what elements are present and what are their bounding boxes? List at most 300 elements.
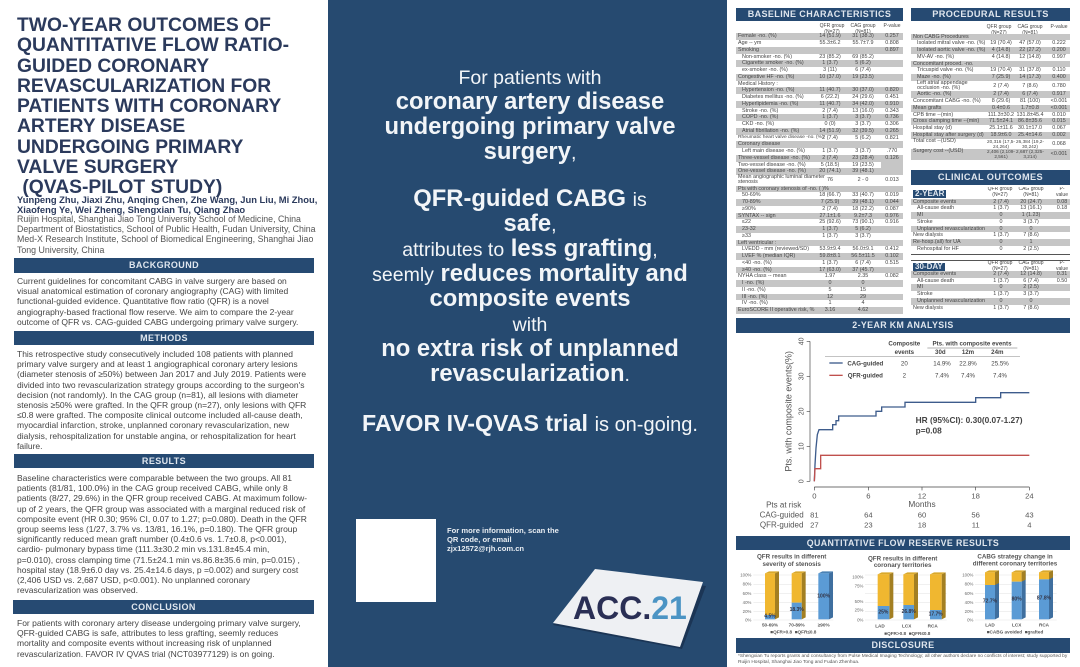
- table: procedural results: Mean grafts: [913, 105, 941, 111]
- table: 2-year outcomes: 0.08: [1057, 199, 1067, 205]
- text: results: p=0.010), cross clamping time (71.5±24.1 min vs.86.8±35.6 min, p=0.015) ,: [17, 555, 300, 565]
- heading: 2-year KM analysis: 2-YEAR KM ANALYSIS: [852, 320, 954, 330]
- table: baseline characteristics: 23 (28.4): [852, 155, 874, 161]
- table: baseline characteristics: ≥33: [742, 233, 751, 239]
- table: baseline characteristics: 17 (63.0): [819, 267, 841, 273]
- legend table: Composite: [888, 341, 921, 348]
- table: 2-year outcomes: 0: [1000, 239, 1002, 245]
- table: baseline characteristics: 3 (3.7): [855, 121, 871, 127]
- table: 30-day outcomes: MI: [917, 284, 923, 290]
- table: 2-year outcomes: All-cause death: [917, 205, 954, 211]
- table: baseline characteristics: 2 (7.4): [822, 108, 838, 114]
- table: procedural results: 0.997: [1052, 54, 1066, 60]
- text: results: group seems less (1/27, 3.7% vs. 13/81, 16.1%, p=0.180). The QFR group: [17, 524, 297, 534]
- y axis labels: 10: [798, 442, 805, 450]
- contact text: QR code, or email: [447, 535, 512, 544]
- table: baseline characteristics: 56.5±11.5: [851, 253, 875, 259]
- table: 2-year outcomes: (N=27): [992, 192, 1008, 198]
- table: baseline characteristics: One-vessel disease -no. (%): [738, 168, 806, 174]
- table: procedural results: 26,384 (19,2-: [1016, 138, 1044, 144]
- table: baseline characteristics: 59.8±8.1: [820, 253, 840, 259]
- table: procedural results: 0.067: [1052, 125, 1066, 131]
- table: 2-year outcomes: Stroke: [917, 219, 933, 225]
- chart: CABG strategy change: 72.7%: [983, 598, 998, 604]
- table: baseline characteristics: 18 (66.7): [819, 192, 841, 198]
- table: procedural results: Maze -no. (%): [917, 74, 951, 80]
- table: baseline characteristics: Hyperlipidemia -no. (%): [742, 101, 798, 107]
- chart: severity of stenosis: ■QFR>0.8 ■QFR≤0.8: [770, 629, 817, 634]
- heading: 2-year KM analysis: [736, 318, 1070, 333]
- table: baseline characteristics: 5: [828, 287, 832, 293]
- table: baseline characteristics: 1 (3.7): [822, 60, 838, 66]
- chart: severity of stenosis: ≥90%: [818, 623, 830, 628]
- chart: coronary territories: coronary territories: [874, 562, 932, 569]
- chart: severity of stenosis: 50-69%: [762, 623, 779, 628]
- table: procedural results: 0.200: [1052, 47, 1066, 53]
- table: procedural results: 19 (70.4): [990, 67, 1012, 73]
- table: procedural results: 0.002: [1052, 132, 1066, 138]
- table: 2-year outcomes: Rehospital for HF: [917, 246, 959, 252]
- x axis labels and risk table: Months: [908, 499, 936, 509]
- legend table: 7.4%: [993, 373, 1008, 380]
- table: procedural results: Hospital stay after surgery (d): [913, 132, 984, 138]
- text: methods: stenosis ≥50% were grafted. In the QFR group (n=27), only lesions with QFR: [17, 400, 306, 410]
- x axis labels and risk table: 24: [1025, 492, 1034, 501]
- table: procedural results: Isolated aortic valve -no. (%): [917, 47, 985, 53]
- table: procedural results: QFR group: [987, 24, 1011, 30]
- table: procedural results: 0.400: [1052, 74, 1066, 80]
- table: baseline characteristics: 70-89%: [742, 199, 761, 205]
- x axis labels and risk table: CAG-guided: [760, 511, 804, 520]
- x axis labels and risk table: [760, 492, 1034, 529]
- table: baseline characteristics: COPD -no. (%): [742, 114, 778, 120]
- table: baseline characteristics: 3.16: [825, 307, 835, 313]
- text: disclosure: [738, 654, 1068, 665]
- table: baseline characteristics: Mean angiographic luminal diameter: [738, 174, 825, 180]
- centre message: findings: composite events: [429, 285, 631, 312]
- table: baseline characteristics: Smoking: [738, 47, 759, 53]
- table: baseline characteristics: 0.265: [885, 128, 899, 134]
- y axis labels: 30: [798, 372, 805, 380]
- chart: coronary territories: LCX: [902, 623, 912, 628]
- table: procedural results: 7 (8.6): [1022, 83, 1038, 89]
- table: 2-year outcomes: (N=81): [1023, 192, 1039, 198]
- title: TWO-YEAR OUTCOMES OF: [17, 15, 271, 36]
- table: 2-year outcomes: 3 (3.7): [1023, 219, 1039, 225]
- legend table: 12m: [962, 349, 975, 356]
- table: baseline characteristics: 20 (74.1): [819, 168, 841, 174]
- table: procedural results: 86.8±35.6: [1018, 118, 1042, 124]
- table: 2-year outcomes: 0: [1030, 226, 1032, 232]
- chart: severity of stenosis: 40%: [743, 600, 751, 605]
- panel: centre navy background: [328, 0, 727, 667]
- text: conclusion: mortality and composite events without increasing risk of unplanned: [17, 638, 272, 648]
- table: baseline characteristics: Non-smoker -no. (%): [742, 54, 792, 60]
- heading: background: [14, 258, 314, 273]
- centre message: findings: safe,: [503, 210, 557, 237]
- table: baseline characteristics: 0.897: [885, 47, 899, 53]
- text: disclosure: Ruijin Hospital, Shanghai Jiao Tong and Fudan Zhenhua.: [738, 660, 859, 665]
- table: procedural results: 2 (7.4): [993, 83, 1009, 89]
- table: baseline characteristics: 2 (7.4): [822, 206, 838, 212]
- legend table: CAG-guided: [847, 360, 884, 367]
- table: baseline characteristics: 3 (3.7): [855, 114, 871, 120]
- title: QUANTITATIVE FLOW RATIO-: [17, 35, 289, 56]
- table: baseline characteristics: 0.976: [885, 213, 899, 219]
- table: procedural results: 3,214): [1023, 154, 1037, 159]
- table: baseline characteristics: Left ventricular :: [738, 240, 776, 246]
- y axis labels: [783, 337, 805, 483]
- table: 30-day outcomes: 2 (2.5): [1023, 284, 1039, 290]
- table: baseline characteristics: 5 (6.2): [855, 60, 871, 66]
- QFR-guided curve: [814, 455, 1029, 481]
- table: baseline characteristics: 3 (3.7): [855, 233, 871, 239]
- table: procedural results: 131.8±45.4: [1017, 112, 1043, 118]
- table: procedural results: 2 (7.4): [993, 91, 1009, 97]
- centre message: findings: QFR-guided CABG is: [413, 185, 647, 212]
- heading: clinical outcomes: [911, 170, 1070, 185]
- text: methods: (diameter stenosis of ≥50%) between Jan 2017 and July 2019. Patients were: [17, 369, 306, 379]
- table: procedural results: 18.9±6.0: [991, 132, 1011, 138]
- charts: QFR stacked bars: [740, 554, 1058, 636]
- table: baseline characteristics: LVEF % (median IQR): [742, 253, 795, 259]
- table: procedural results: <0.001: [1051, 151, 1067, 157]
- table: 2-year outcomes: 2-YEAR: [915, 189, 944, 198]
- table: 2-year outcomes: 1 (3.7): [993, 205, 1009, 211]
- table: baseline characteristics: 0.515: [885, 260, 899, 266]
- table: baseline characteristics: (N=81): [855, 29, 871, 35]
- table: baseline characteristics: 0.087: [885, 206, 899, 212]
- table: procedural results: 2,687 (2,325-: [1016, 149, 1044, 154]
- centre message: findings: seemly reduces mortality and: [372, 260, 688, 287]
- table: procedural results: 0.917: [1052, 91, 1066, 97]
- table: baseline characteristics: SYNTAX -- sign: [738, 213, 776, 219]
- table: procedural results: 4 (14.8): [992, 47, 1010, 53]
- table: baseline characteristics: 5 (6.2): [855, 135, 871, 141]
- contact text: For more information, scan the: [447, 526, 559, 535]
- chart: CABG strategy change: 0%: [967, 617, 973, 622]
- table: 2-year outcomes: value: [1056, 192, 1068, 198]
- hazard ratio annotation: p=0.08: [916, 426, 942, 436]
- chart: CABG strategy change: different coronary territories: [973, 561, 1058, 568]
- table: baseline characteristics: 29: [860, 294, 866, 300]
- table: procedural results: MV-AV -no. (%): [917, 54, 954, 60]
- table: 30-day outcomes: 7 (8.6): [1023, 305, 1039, 311]
- text: methods: ≤0.8 were grafted. The composite clinical outcome included all-cause death,: [17, 410, 303, 420]
- table: procedural results: Cross clamping time --(min): [913, 118, 979, 124]
- table: baseline characteristics: 6 (22.2): [821, 94, 839, 100]
- centre message: patients: coronary artery disease: [396, 88, 664, 115]
- title: PATIENTS WITH CORONARY: [17, 96, 281, 117]
- table: baseline characteristics: 19 (23.5): [852, 74, 874, 80]
- text: results: cardio- pulmonary bypass time (111.3±30.2 min vs.131.8±45.4 min,: [17, 544, 269, 554]
- x axis labels and risk table: 4: [1027, 520, 1032, 529]
- x axis labels and risk table: QFR-guided: [760, 520, 803, 529]
- heading: results: [14, 454, 314, 468]
- table: baseline characteristics: 3 (3.7): [855, 148, 871, 154]
- table: procedural results: 31 (37.8): [1019, 67, 1041, 73]
- text: methods: myocardial infarction, stroke, unplanned coronary revascularization, new: [17, 420, 289, 430]
- text: conclusion: For patients with coronary artery disease undergoing primary valve surgery,: [17, 618, 301, 628]
- x axis labels and risk table: 23: [864, 520, 873, 529]
- table: baseline characteristics: 4: [862, 300, 864, 306]
- table: 30-day outcomes: 2 (7.4): [993, 271, 1009, 277]
- table: baseline characteristics: 55.7±7.9: [853, 40, 873, 46]
- text: background: Current guidelines for concomitant CABG in valve surgery are based on: [17, 276, 287, 286]
- text: results: revascularization was observed.: [17, 585, 138, 595]
- table: baseline characteristics: 0.820: [885, 87, 899, 93]
- heading: baseline characteristics: BASELINE CHARACTERISTICS: [748, 9, 891, 19]
- text: results: significantly reduced mean graft number (0.4±0.6 vs. 1.7±0.8, p<0.001),: [17, 534, 286, 544]
- x axis labels and risk table: Pts at risk: [766, 501, 802, 510]
- table: baseline characteristics: 76: [827, 177, 833, 183]
- table: procedural results: Concomitant proced. -no.: [913, 60, 974, 66]
- chart: CABG strategy change: 60%: [965, 591, 973, 596]
- table: 2-year outcomes: 2 (2.5): [1023, 246, 1039, 252]
- chart: severity of stenosis: severity of stenosis: [762, 561, 821, 568]
- legend table: 22.8%: [959, 360, 977, 367]
- legend table: 14.9%: [933, 360, 951, 367]
- CAG-guided curve: [814, 393, 1029, 481]
- table: baseline characteristics: Atrial fibrillation -no. (%): [742, 128, 799, 134]
- text: results: (2,406 USD vs. 2,687 USD, p<0.001). No unplanned coronary: [17, 575, 250, 585]
- table: 2-year outcomes: 0: [1000, 212, 1002, 218]
- table: 30-day outcomes: QFR group: [988, 260, 1012, 266]
- y axis labels: 20: [798, 407, 805, 415]
- table: 30-day outcomes: Composite events: [913, 271, 956, 277]
- chart: coronary territories: LAD: [875, 623, 885, 628]
- table: 2-year outcomes: New dialysis: [913, 232, 943, 238]
- table: baseline characteristics: 2 (7.4): [822, 135, 838, 141]
- table: baseline characteristics: I -no. (%): [742, 280, 764, 286]
- chart: CABG strategy change: [962, 554, 1058, 634]
- title: [17, 15, 289, 198]
- chart: coronary territories: 25%: [878, 610, 889, 616]
- table: 30-day outcomes: value: [1056, 266, 1068, 272]
- table: baseline characteristics: 7 (25.9): [821, 199, 839, 205]
- centre message: findings: [372, 185, 688, 387]
- text: results: patients (81/81, 100.0%) in the CAG group received CABG, while only 8: [17, 483, 288, 493]
- table: 30-day outcomes: CAG group: [1018, 260, 1044, 266]
- chart: coronary territories: 25%: [855, 608, 863, 613]
- chart: severity of stenosis: QFR results in different: [757, 554, 826, 561]
- text: methods: [17, 349, 306, 451]
- table: baseline characteristics: 0.306: [885, 121, 899, 127]
- centre message: findings: with: [513, 314, 547, 336]
- table: baseline characteristics: 18 (22.2): [852, 206, 874, 212]
- x axis labels and risk table: 11: [972, 520, 980, 529]
- table: baseline characteristics: 34 (42.0): [852, 101, 874, 107]
- table: procedural results: 14 (17.3): [1019, 74, 1041, 80]
- table: baseline characteristics: 2.35: [858, 273, 868, 279]
- table: procedural results: Total cost --(USD): [913, 138, 956, 144]
- text: results: hospital stay (18.9±6.0 day vs. 25.4±14.6 days, p =0.002) and surgery cost: [17, 565, 298, 575]
- table: baseline characteristics: 0.343: [885, 108, 899, 114]
- heading: baseline characteristics: [736, 8, 903, 21]
- table: 30-day outcomes: 0.31: [1057, 271, 1067, 277]
- chart: severity of stenosis: 0%: [745, 617, 751, 622]
- title: (QVAS-PILOT STUDY): [22, 177, 222, 198]
- table: 2-year outcomes: 20 (24.7): [1020, 199, 1042, 205]
- centre message: patients: surgery,: [484, 138, 576, 165]
- table: baseline characteristics: Stroke -no. (%): [742, 108, 778, 114]
- table: 30-day outcomes: 0: [1000, 284, 1002, 290]
- table: procedural results: 22 (27.2): [1019, 47, 1041, 53]
- table: procedural results: CPB time --(min): [913, 112, 953, 118]
- heading: clinical outcomes: CLINICAL OUTCOMES: [938, 172, 1043, 182]
- table: baseline characteristics: Age -- ym: [738, 40, 761, 46]
- table: 30-day outcomes: 1 (3.7): [993, 291, 1009, 297]
- table: procedural results: Non CABG Procedures: [913, 34, 969, 40]
- table: procedural results: 30,242): [1022, 144, 1038, 149]
- table: baseline characteristics: 0.126: [885, 155, 899, 161]
- text: methods: primary valve surgery and at least 1 angiographical coronary artery lesions: [17, 359, 298, 369]
- table: baseline characteristics: 6 (7.4): [855, 260, 871, 266]
- centre message: patients: [385, 67, 675, 165]
- table: baseline characteristics: Left main disease -no. (%): [742, 148, 805, 154]
- table: baseline characteristics: 0 (0): [824, 121, 836, 127]
- table: baseline characteristics: stenosis: [738, 179, 758, 185]
- table: 2-year outcomes: 1 (3.7): [993, 232, 1009, 238]
- chart: CABG strategy change: 80%: [1012, 597, 1022, 603]
- chart: coronary territories: 0%: [857, 617, 863, 622]
- table: baseline characteristics: 0.257: [885, 33, 899, 39]
- title: REVASCULARIZATION FOR: [17, 76, 271, 97]
- text: results: [17, 473, 307, 595]
- table: 2-year outcomes: 13 (16.1): [1020, 205, 1042, 211]
- table: baseline characteristics: 5 (18.5): [821, 162, 839, 168]
- table: baseline characteristics: Coronary disease: [738, 141, 780, 147]
- centre message: findings: revascularization.: [430, 360, 630, 387]
- table: procedural results: 1.7±0.8: [1021, 105, 1039, 111]
- table: 2-year outcomes: 7 (8.6): [1023, 232, 1039, 238]
- table: procedural results: 0.068: [1052, 140, 1066, 146]
- table: procedural results: Isolated mitral valve -no. (%): [917, 40, 985, 46]
- heading: methods: METHODS: [140, 333, 188, 343]
- chart: CABG strategy change: ■CABG avoided ■grafted: [987, 629, 1043, 634]
- x axis labels and risk table: 12: [918, 492, 926, 501]
- affiliations: Department of Biostatistics, School of Public Health, Fudan University, China: [17, 224, 316, 234]
- table: baseline characteristics: Female -no. (%): [738, 33, 777, 39]
- table: baseline characteristics: 37 (45.7): [852, 267, 874, 273]
- heading: conclusion: CONCLUSION: [131, 602, 196, 612]
- authors: Yunpeng Zhu, Jiaxi Zhu, Anqing Chen, Zhe Wang, Jun Liu, Mi Zhou,: [17, 194, 317, 205]
- table: baseline characteristics: 1.97: [825, 273, 835, 279]
- contact text: zjx12572@rjh.com.cn: [447, 544, 524, 553]
- table: baseline characteristics: 0.082: [885, 273, 899, 279]
- text: results: Baseline characteristics were comparable between the two groups. All 81: [17, 473, 292, 483]
- table: baseline characteristics: 0: [828, 280, 832, 286]
- table: 30-day outcomes: Unplanned revascularization: [917, 298, 985, 304]
- heading: conclusion: [13, 600, 314, 614]
- table: baseline characteristics: 14 (51.9): [819, 128, 841, 134]
- table: baseline characteristics: 0.808: [885, 40, 899, 46]
- table: procedural results: 0.110: [1052, 67, 1066, 73]
- table: baseline characteristics: 0.910: [885, 101, 899, 107]
- table: procedural results: 81 (100): [1020, 98, 1040, 104]
- table: procedural results: Concomitant CABG -no. (%): [913, 98, 981, 104]
- table: baseline characteristics: 0.044: [885, 199, 899, 205]
- table: baseline characteristics: 73 (90.1): [852, 219, 874, 225]
- table: baseline characteristics: <40 -no. (%): [742, 260, 772, 266]
- table: 2-year outcomes: MI: [917, 212, 923, 218]
- table: procedural results: (N=27): [991, 30, 1007, 36]
- chart: CABG strategy change: CABG strategy change in: [977, 554, 1053, 561]
- x axis labels and risk table: 64: [864, 511, 873, 520]
- table: procedural results: 12 (14.8): [1019, 54, 1041, 60]
- table: baseline characteristics: 2 (7.4): [822, 155, 838, 161]
- table: baseline characteristics: 32 (39.5): [852, 128, 874, 134]
- x axis labels and risk table: 18: [918, 520, 926, 529]
- table: baseline characteristics: 19 (23.5): [852, 162, 874, 168]
- table: baseline characteristics: 56.0±9.1: [853, 246, 873, 252]
- chart: severity of stenosis: [740, 554, 833, 634]
- table: baseline characteristics: Medical History :: [738, 81, 778, 87]
- chart: severity of stenosis: 100%: [817, 594, 831, 600]
- chart: coronary territories: 100%: [852, 574, 863, 579]
- table: baseline characteristics: 1: [828, 300, 832, 306]
- text: results: composite event (HR 0.30; 95% CI, 0.07 to 1.27; p=0.080). Death in the QFR: [17, 514, 307, 524]
- table: procedural results: 0.222: [1052, 40, 1066, 46]
- table: 30-day outcomes: Stroke: [917, 291, 933, 297]
- table: baseline characteristics: 0.102: [885, 253, 899, 259]
- table: baseline characteristics: 3 (11): [823, 67, 837, 73]
- chart: coronary territories: 75%: [855, 584, 863, 589]
- table: baseline characteristics: CKD -no. (%): [742, 121, 774, 127]
- table: baseline characteristics: II -no. (%): [742, 287, 766, 293]
- table: baseline characteristics: Diabetes mellitus -no. (%): [742, 94, 804, 100]
- table: procedural results: occlusion -no. (%): [917, 85, 960, 91]
- table: procedural results: 0.010: [1052, 112, 1066, 118]
- table: procedural results: 111.3±30.2: [988, 112, 1014, 118]
- heading: procedural results: [911, 8, 1070, 21]
- chart: coronary territories: 26.8%: [902, 609, 916, 615]
- table: baseline characteristics: 0.736: [885, 114, 899, 120]
- table: procedural results: <0.001: [1051, 98, 1067, 104]
- text: results: up of 2 years, the QFR group was associated with a marginal reduced risk of: [17, 504, 305, 514]
- title: UNDERGOING PRIMARY: [17, 137, 243, 158]
- text: background: outcome of QFR vs. CAG-guided CABG undergoing primary valve surgery.: [17, 317, 298, 327]
- table: procedural results: CAG group: [1017, 24, 1042, 30]
- table: procedural results: 0.4±0.6: [992, 105, 1010, 111]
- table: 2-year outcomes: Unplanned revascularization: [917, 226, 985, 232]
- table: baseline characteristics: 9.2±7.3: [854, 213, 872, 219]
- table: procedural results: 47 (57.0): [1019, 40, 1041, 46]
- affiliations: Med-X Research Institute, School of Biomedical Engineering, Shanghai Jiao: [17, 234, 313, 244]
- table: baseline characteristics: 50-69%: [742, 192, 761, 198]
- text: background: visual anatomical estimation of coronary angiography (CAG) with limited: [17, 286, 288, 296]
- table: baseline characteristics: 14 (51.9): [819, 33, 841, 39]
- table: baseline characteristics: IV -no. (%): [742, 300, 768, 306]
- table: 2-year outcomes: 2 (7.4): [993, 199, 1009, 205]
- table: procedural results: Aortic -no. (%): [917, 91, 951, 97]
- y axis labels: 40: [798, 337, 805, 345]
- heading: procedural results: PROCEDURAL RESULTS: [932, 9, 1049, 19]
- table: 2-year outcomes: 0: [1000, 219, 1002, 225]
- table: 30-day outcomes: (N=81): [1023, 266, 1039, 272]
- x axis labels and risk table: 0: [812, 492, 816, 501]
- chart: CABG strategy change: 20%: [965, 609, 973, 614]
- table: baseline characteristics: Rheumatic heart valve disease -no. (%): [738, 135, 824, 140]
- table: baseline characteristics: 0: [862, 280, 864, 286]
- table: baseline characteristics: LVEDD - mm (reviewed/SD): [742, 246, 809, 252]
- table: 30-day outcomes: 12 (14.8): [1020, 271, 1042, 277]
- table: baseline characteristics: Congestive HF -no. (%): [738, 74, 794, 80]
- table: baseline characteristics: 0.019: [885, 192, 899, 198]
- y axis labels: 0: [798, 479, 805, 483]
- table: procedural results: 2,561): [994, 154, 1008, 159]
- chart: coronary territories: ■QFR>0.8 ■QFR≤0.8: [884, 631, 931, 636]
